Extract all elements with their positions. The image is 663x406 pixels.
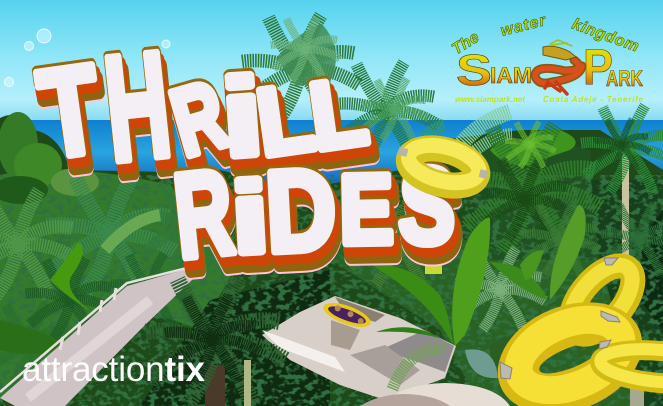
logo: Siam Park [449,12,644,104]
left jungle foliage [0,175,240,385]
logo web and location line: www.siampark.net [455,95,525,104]
second palm [332,63,438,160]
title: Thrill Rides: L [309,70,378,183]
lower right slide [262,296,456,400]
foliage shadow texture [0,175,663,406]
logo wordmark: S [456,46,492,95]
title: Thrill Rides: S [402,157,463,280]
title: Thrill Rides: H [101,27,181,200]
bottom domes [360,383,510,406]
title: Thrill Rides: i [221,63,270,187]
title: Thrill Rides: E [342,161,397,271]
title: Thrill Rides: L [307,64,376,177]
title: Thrill Rides: R [164,67,240,184]
title: Thrill Rides: i [229,161,271,274]
title: Thrill Rides: R [161,60,237,177]
logo wordmark: ARK [606,66,643,91]
centre-right cycad [460,122,600,252]
logo tagline: kingdom [570,16,641,56]
title: Thrill Rides: L [256,76,325,189]
title: Thrill Rides: i [234,174,276,287]
back ring [559,254,644,345]
right palm [580,106,663,406]
front ring [498,302,642,406]
raft [320,298,374,332]
logo tagline: water [499,12,548,40]
logo: Siam Park: Costa Adeje - Tenerife [543,95,644,104]
jungle background [0,115,663,406]
title: Thrill Rides: T [34,45,112,192]
title: Thrill Rides: D [263,144,339,277]
top palm [241,15,359,123]
yellow rings bottom right [498,254,663,406]
logo wordmark [456,39,643,95]
title: Thrill Rides: D [266,151,342,284]
pale palm fronds over sea [420,112,512,162]
side ring [599,345,663,388]
title: Thrill Rides: L [251,63,320,176]
lower right foliage [345,193,663,378]
logo tagline: The [449,29,482,58]
logo wordmark: IAM [490,63,532,88]
title: Thrill Rides: i [218,56,267,180]
title: Thrill Rides: S [397,144,458,267]
title: Thrill Rides: R [168,144,239,284]
yellow ring on title [393,136,492,194]
banana leaves [372,205,586,390]
title: Thrill Rides [31,20,463,297]
title: Thrill Rides: i [223,69,272,193]
sky [0,0,663,125]
attractiontix logo: attractiontix [22,350,206,389]
logo wordmark: P [583,39,613,95]
centre palm [145,277,285,406]
logo tagline [449,12,641,58]
title: Thrill Rides: L [304,57,373,170]
title: Thrill Rides: E [344,167,399,277]
title: Thrill Rides: H [98,20,178,193]
title: Thrill Rides: i [232,168,274,281]
sea [0,120,663,185]
icon: dragon [535,40,582,94]
title: Thrill Rides: H [103,33,183,206]
title: Thrill Rides: R [173,157,244,297]
upper left slide [0,268,192,406]
title: Thrill Rides: D [268,157,344,290]
title: Thrill Rides: L [254,70,323,183]
title: Thrill Rides: S [400,151,461,274]
title: Thrill Rides: T [36,51,114,198]
left bush [0,112,99,204]
title: Thrill Rides: R [166,73,242,190]
title: Thrill Rides: T [31,38,109,185]
ring valves [500,258,620,379]
title: Thrill Rides: E [339,154,394,264]
title: Thrill Rides: R [171,151,242,291]
bubbles [4,29,170,86]
